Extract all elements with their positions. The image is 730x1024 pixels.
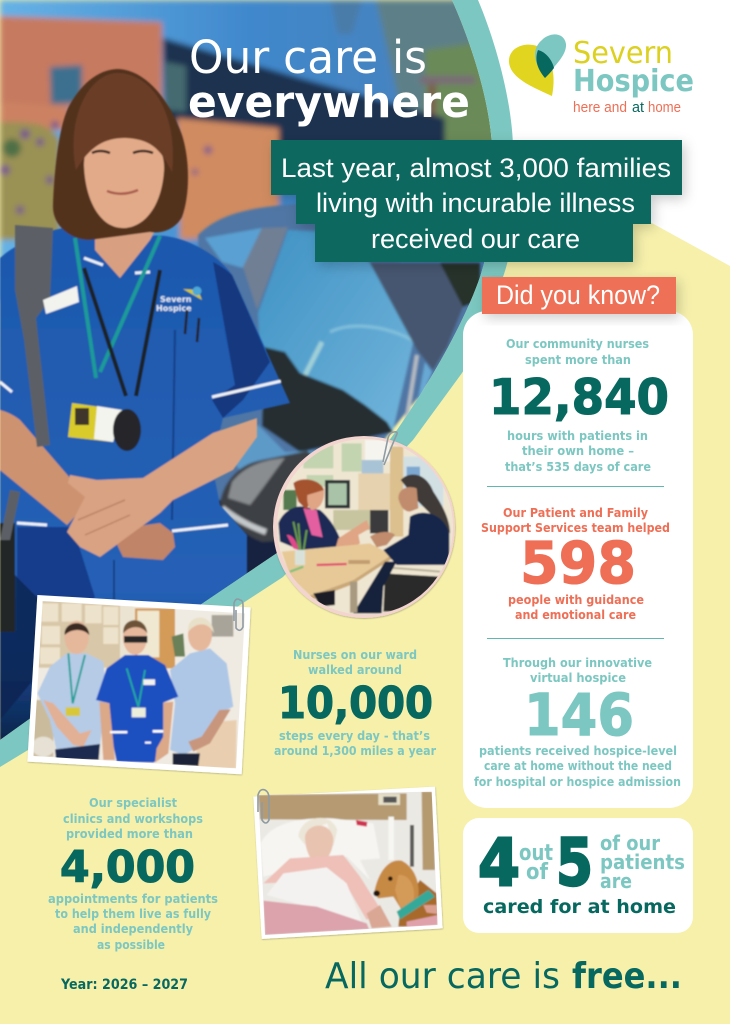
wing mirror — [220, 449, 312, 543]
text block: nurses walked 10,000 steps: 10,000 — [278, 678, 433, 729]
text block: 4,000 appointments: provided more than — [66, 826, 193, 841]
teal curved band — [0, 0, 515, 767]
photo: nurse standing beside car — [0, 0, 500, 745]
text block: nurses walked 10,000 steps: steps every day - that’s — [279, 728, 430, 743]
heading: did you know: Did you know? — [496, 280, 660, 310]
banner: last year almost 3,000 families: living with incurable illness — [316, 188, 635, 218]
logo: Severn Hospice — [509, 34, 694, 116]
panel: 4 out of 5 patients: are — [600, 869, 632, 893]
text block: nurses walked 10,000 steps — [274, 647, 437, 758]
front window — [205, 228, 262, 268]
panel: 4 out of 5 patients: 5 — [556, 826, 593, 901]
panel: 4 out of 5 patients — [463, 818, 693, 933]
photo: three nurses — [27, 595, 251, 774]
lanyards — [75, 236, 160, 378]
icon: paperclip on patient photo — [258, 790, 269, 823]
stat: 146 patients — [474, 655, 681, 789]
embroidered uniform logo — [156, 286, 202, 313]
stat: 598 people: people with guidance — [508, 592, 644, 607]
text block: 4,000 appointments: clinics and workshops — [63, 811, 203, 826]
text block: nurses walked 10,000 steps: around 1,300 miles a year — [274, 743, 437, 758]
stat: 146 patients: for hospital or hospice admission — [474, 774, 681, 789]
text block: 4,000 appointments: Our specialist — [89, 795, 177, 810]
logo heart icon — [509, 34, 566, 96]
banner: last year almost 3,000 families — [271, 140, 682, 262]
stat: 598 people: Our Patient and Family — [503, 505, 648, 520]
white sleeve and waist trims — [0, 381, 281, 531]
uniform — [0, 228, 290, 745]
stat: 12,840 hours: 12,840 — [489, 369, 669, 426]
pillows — [261, 818, 380, 880]
photo: two women at table in circle — [270, 430, 460, 620]
text block: 4,000 appointments: and independently — [73, 921, 193, 936]
logo: Severn Hospice: home — [648, 99, 681, 116]
closing statement: all our care is free: free... — [572, 956, 682, 997]
text block: 4,000 appointments: appointments for patients — [48, 891, 218, 906]
stat: 12,840 hours: that’s 535 days of care — [505, 459, 651, 474]
stat: 598 people: Support Services team helped — [481, 520, 670, 535]
stat: 146 patients: care at home without the need — [484, 758, 672, 773]
stat: 12,840 hours: hours with patients in — [507, 428, 648, 443]
icon: paperclip on nurses photo — [234, 599, 243, 630]
right woman — [401, 474, 450, 533]
left woman — [278, 506, 340, 551]
stat: 12,840 hours: Our community nurses — [506, 336, 649, 351]
text block: 4,000 appointments — [48, 795, 218, 952]
chair and legs — [383, 573, 440, 612]
left arm — [0, 410, 97, 525]
title: everywhere — [188, 77, 470, 128]
icon: paperclip on circle photo — [383, 432, 397, 465]
panel: 4 out of 5 patients: of our — [600, 831, 660, 855]
dog — [398, 880, 438, 927]
id badge — [68, 403, 122, 442]
title: Our care is — [189, 31, 427, 84]
banner: last year almost 3,000 families: Last year, almost 3,000 families — [281, 153, 671, 183]
closing statement: all our care is free: All our care is — [325, 956, 560, 997]
stat: 12,840 hours: spent more than — [525, 352, 631, 367]
text block: nurses walked 10,000 steps: walked around — [308, 662, 402, 677]
panel: 4 out of 5 patients: of — [526, 860, 548, 885]
hair — [53, 69, 188, 240]
stat: 146 patients: patients received hospice-level — [479, 743, 677, 758]
face — [84, 135, 164, 228]
right arm and upper hand — [67, 418, 257, 557]
logo: Severn Hospice: here and — [573, 99, 627, 116]
panel: 4 out of 5 patients: patients — [600, 850, 685, 874]
stat: 598 people: 598 — [520, 529, 636, 597]
panel: statistics card — [463, 311, 693, 808]
text block: nurses walked 10,000 steps: Nurses on our ward — [293, 647, 417, 662]
stat: 12,840 hours: their own home – — [522, 443, 634, 458]
backpack strap — [15, 225, 53, 447]
stat: 146 patients: 146 — [524, 681, 634, 749]
fringe — [74, 73, 173, 172]
name tag — [43, 286, 79, 314]
lower hand — [110, 523, 175, 560]
text block: 4,000 appointments: as possible — [97, 937, 165, 952]
stat: 598 people — [481, 505, 670, 622]
pens and stationery — [293, 522, 307, 552]
panel: 4 out of 5 patients: out — [519, 841, 553, 866]
stat: 598 people: and emotional care — [515, 607, 636, 622]
patient — [298, 818, 337, 847]
panel: 4 out of 5 patients: cared for at home — [483, 896, 676, 918]
main window — [258, 230, 413, 450]
white header area — [470, 0, 730, 266]
reflection of trees — [262, 347, 393, 452]
stat: 146 patients: virtual hospice — [530, 670, 626, 685]
year label: Year: 2026 – 2027 — [60, 977, 188, 993]
nurse left — [37, 653, 106, 752]
stat: 12,840 hours — [489, 336, 669, 474]
closing statement: all our care is free — [325, 956, 682, 997]
nurse center — [96, 655, 178, 763]
text block: 4,000 appointments: to help them live as fully — [55, 906, 211, 921]
text block: 4,000 appointments: 4,000 — [60, 842, 195, 893]
window rail — [370, 263, 463, 370]
logo: Severn Hospice: at — [632, 99, 645, 116]
table — [282, 543, 392, 596]
nurse right — [170, 648, 233, 755]
logo: Severn Hospice: Severn — [573, 36, 673, 71]
panel: 4 out of 5 patients: 4 — [478, 826, 520, 901]
photo: patient in bed with dog — [253, 787, 443, 939]
car body — [198, 204, 490, 620]
stat: 146 patients: Through our innovative — [503, 655, 652, 670]
banner: last year almost 3,000 families: received our care — [371, 224, 580, 254]
title — [188, 31, 470, 128]
pillar — [243, 227, 288, 310]
neck — [94, 231, 155, 279]
logo: Severn Hospice: Hospice — [573, 64, 694, 99]
embroidered uniform logo: Severn — [160, 295, 192, 304]
embroidered uniform logo: Hospice — [156, 304, 192, 313]
